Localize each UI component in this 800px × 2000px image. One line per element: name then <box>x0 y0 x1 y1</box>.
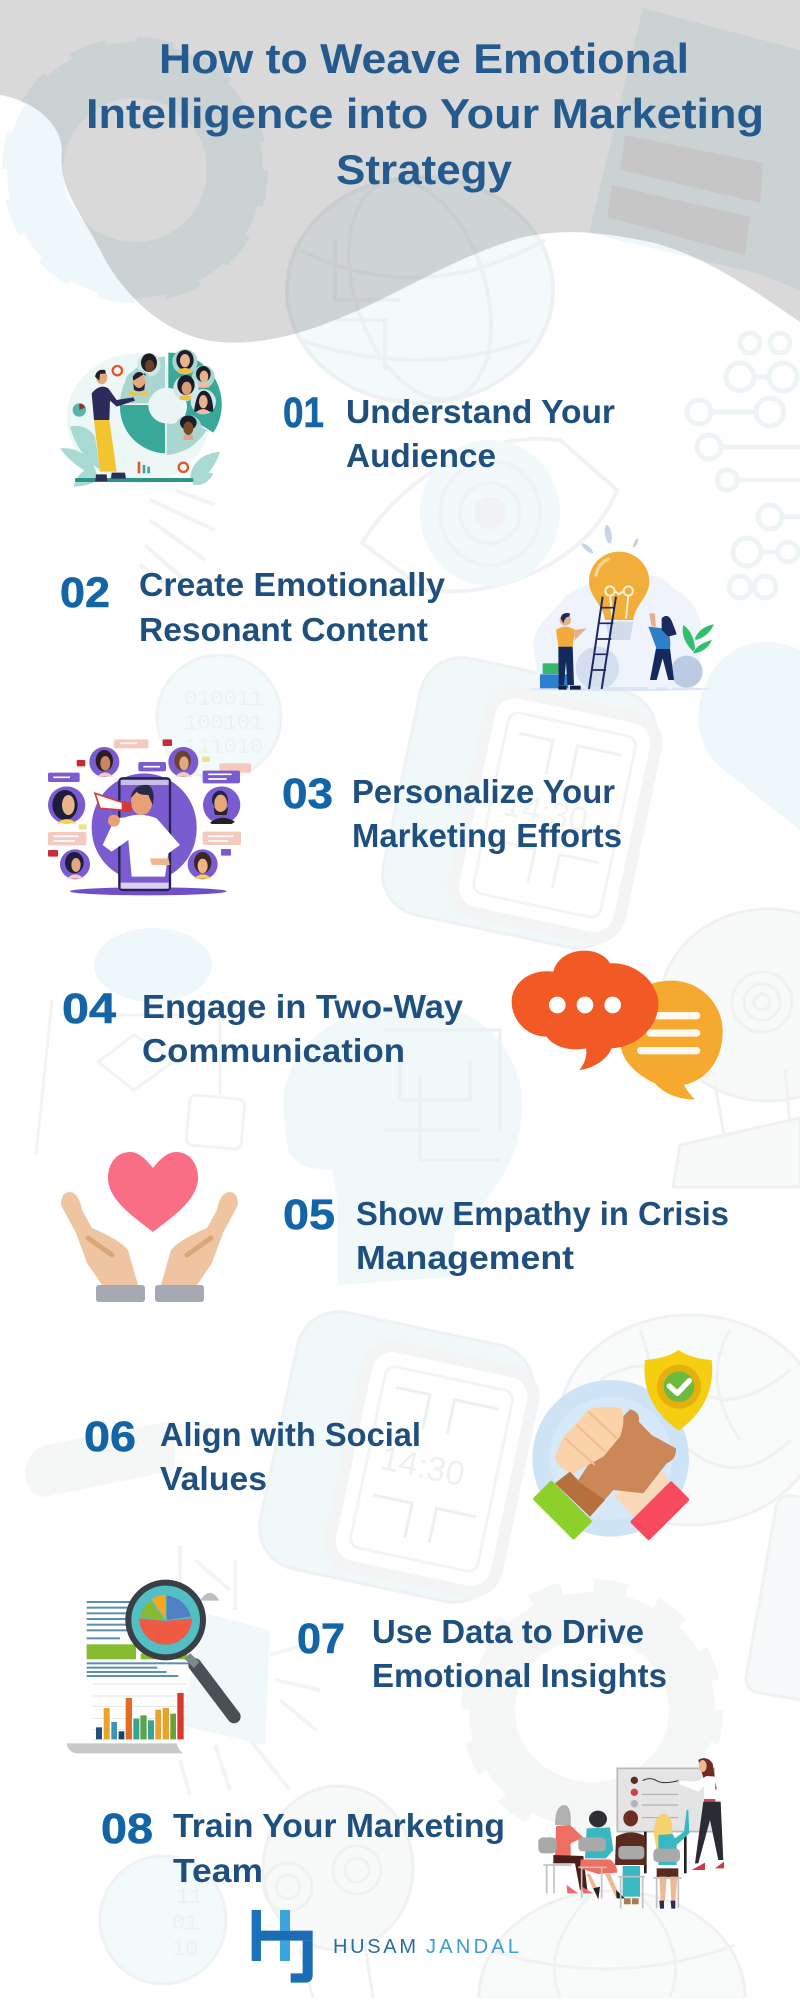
step 03: 03 <box>282 770 333 818</box>
globe top <box>287 162 553 418</box>
robot head right <box>660 909 800 1187</box>
step 02: 02 <box>60 569 110 617</box>
illustration: handshake with shield <box>532 1350 712 1541</box>
smartwatch lower <box>252 1304 543 1610</box>
step 01 <box>283 389 615 474</box>
step 05: Show Empathy in Crisis <box>356 1195 729 1232</box>
illustration: speech bubbles <box>512 951 723 1099</box>
step 02 <box>60 566 446 648</box>
gear top left <box>15 50 255 290</box>
step 05: Management <box>356 1239 574 1276</box>
bulb shape right <box>698 642 800 830</box>
eye <box>362 439 617 592</box>
step 06: Values <box>160 1460 267 1497</box>
step 05: 05 <box>283 1191 335 1239</box>
step 01: 01 <box>283 389 324 437</box>
illustration: hands holding heart <box>61 1152 238 1302</box>
brand name: HUSAM <box>333 1936 416 1958</box>
icon: left hand <box>61 1192 145 1302</box>
binary circle lower: 10 <box>172 1937 198 1962</box>
student 1 <box>538 1805 593 1893</box>
grey wave header <box>0 0 800 343</box>
binary circle upper <box>157 655 281 779</box>
paper top right <box>589 8 800 290</box>
illustration: team training <box>538 1758 724 1909</box>
step 05 <box>283 1191 729 1276</box>
step 07: Use Data to Drive <box>372 1613 644 1650</box>
circuit lines left <box>140 490 215 590</box>
chip and circuits <box>150 1545 320 1795</box>
binary circle lower: 11 <box>176 1885 202 1910</box>
step 03: Personalize Your <box>352 773 615 810</box>
title: How to Weave Emotional <box>159 35 689 82</box>
pipe left <box>25 1420 175 1497</box>
step 04: Engage in Two-Way <box>142 988 464 1025</box>
smartwatch upper <box>375 650 666 956</box>
illustration: data magnifier <box>67 1583 234 1753</box>
title: Strategy <box>336 146 513 193</box>
step 04 <box>62 985 464 1069</box>
step 07: Emotional Insights <box>372 1657 667 1694</box>
globe bottom right <box>479 1891 745 1999</box>
binary circle lower: 01 <box>172 1911 198 1936</box>
step 03 <box>282 770 622 854</box>
step 06: 06 <box>84 1413 136 1461</box>
step 07: 07 <box>297 1615 345 1663</box>
icon: right hand <box>155 1192 238 1302</box>
binary circle upper: 111010 <box>184 735 263 760</box>
step 04: Communication <box>142 1032 405 1069</box>
step 02: Resonant Content <box>139 611 428 648</box>
student 4 <box>653 1810 689 1909</box>
step 08: Team <box>173 1852 263 1889</box>
binary circle upper: 100101 <box>184 711 263 736</box>
circuit nodes right <box>687 333 800 598</box>
title <box>86 35 764 193</box>
step 01: Audience <box>346 437 496 474</box>
step 03: Marketing Efforts <box>352 817 622 854</box>
logo: Husam Jandal: JANDAL <box>426 1936 519 1958</box>
step 08 <box>101 1805 505 1889</box>
binary circle lower <box>100 1856 226 1984</box>
step 08: Train Your Marketing <box>173 1807 505 1844</box>
robot head lower <box>263 1786 413 1998</box>
icon: HJ monogram <box>252 1910 313 1983</box>
student 3 <box>615 1810 647 1908</box>
flowchart lines <box>36 1000 245 1155</box>
step 04: 04 <box>62 985 116 1033</box>
step 02: Create Emotionally <box>139 566 446 603</box>
step 01: Understand Your <box>346 393 615 430</box>
step 08: 08 <box>101 1805 153 1853</box>
smartwatch upper: 14:30 <box>500 785 591 840</box>
student 2 <box>578 1811 625 1899</box>
brain <box>560 1315 800 1525</box>
logo: Husam Jandal <box>252 1910 519 1983</box>
illustration: idea bulb <box>529 525 714 691</box>
title: Intelligence into Your Marketing <box>86 90 764 137</box>
illustration: megaphone influencer <box>48 739 251 895</box>
binary circle upper: 010011 <box>184 687 263 712</box>
illustration: audience analysis <box>60 349 222 487</box>
step 06 <box>84 1413 421 1497</box>
icon: heart <box>108 1152 198 1232</box>
oval <box>94 928 212 1002</box>
smartwatch lower: 14:30 <box>377 1439 468 1494</box>
gear lower right <box>472 1590 712 1830</box>
step 06: Align with Social <box>160 1416 421 1453</box>
head silhouette <box>283 1003 522 1285</box>
phone right lower <box>744 1493 800 1706</box>
step 07 <box>297 1613 667 1694</box>
